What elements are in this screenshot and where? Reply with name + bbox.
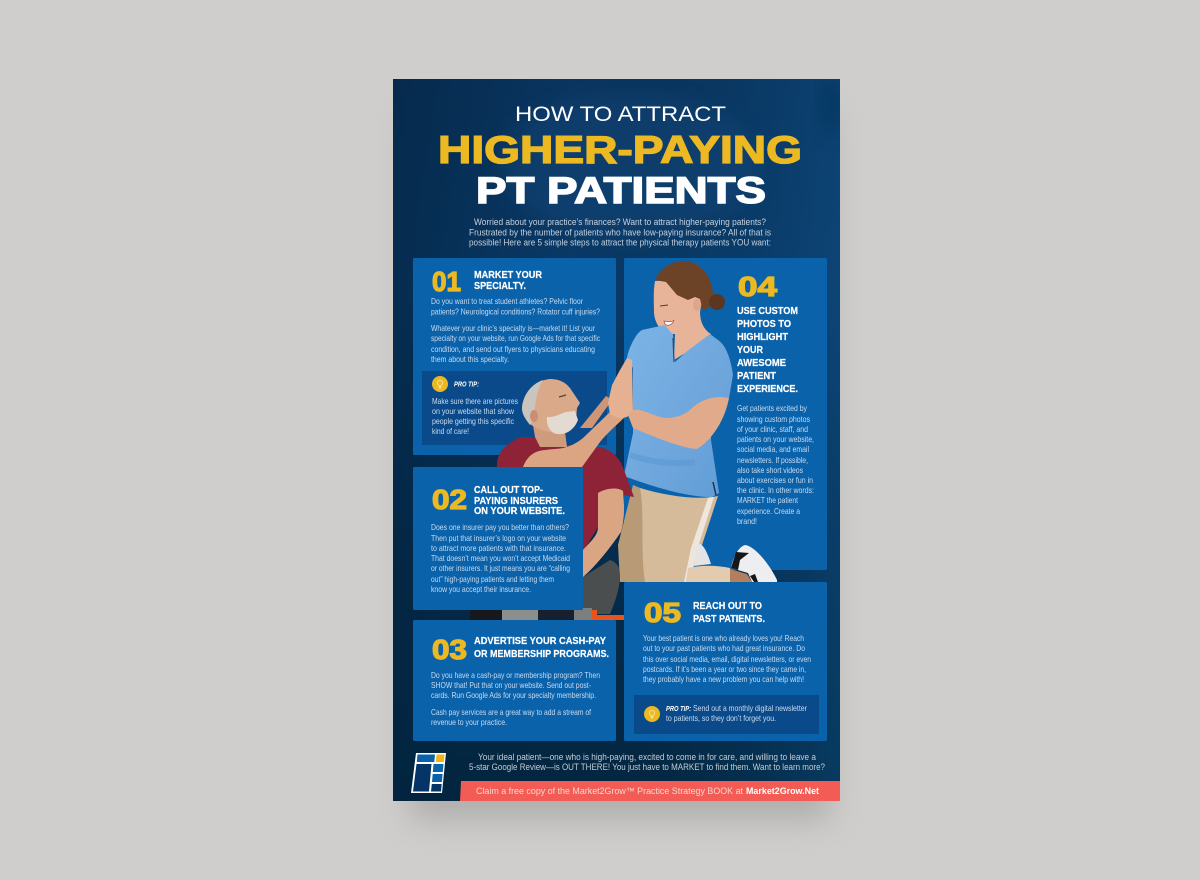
- closing text: [469, 752, 825, 772]
- step 04 body: about exercises or fun in: [737, 476, 813, 485]
- photo: patient high-fiving physical therapist: [470, 261, 777, 620]
- patient beard: [547, 411, 578, 434]
- pro tip box 1: [422, 371, 607, 445]
- step 02 heading: CALL OUT TOP-: [474, 485, 543, 496]
- icon: lightbulb: [432, 376, 448, 392]
- step 05 body: [643, 634, 811, 684]
- panel: step 03 cash-pay programs: [413, 620, 616, 741]
- step 01 body: [431, 297, 600, 364]
- closing text: Your ideal patient—one who is high-paying, excited to come in for care, and willing to leave a: [478, 752, 816, 762]
- pro tip text: [666, 704, 807, 723]
- step 04 body: experience. Create a: [737, 507, 800, 516]
- banner text: Market2Grow.Net: [746, 786, 820, 797]
- patient grey hair: [522, 380, 543, 425]
- patient head: [522, 379, 580, 447]
- nurse hair: [655, 261, 725, 311]
- closing text: 5-star Google Review—is OUT THERE! You just have to MARKET to find them. Want to learn more?: [469, 762, 825, 772]
- step 04 heading: EXPERIENCE.: [737, 384, 798, 395]
- step 04 body: showing custom photos: [737, 415, 810, 424]
- pro tip box 5: [634, 695, 819, 734]
- step 04 heading: USE CUSTOM: [737, 306, 798, 317]
- step 04 heading: HIGHLIGHT: [737, 332, 788, 343]
- title: HIGHER-PAYING: [438, 129, 802, 172]
- step number 02: 02: [432, 484, 467, 515]
- step 04 heading: YOUR: [737, 345, 763, 356]
- pro tip text: kind of care!: [432, 427, 469, 436]
- step 04 heading: [737, 306, 798, 395]
- step 01 body: condition, and send out flyers to physicians educating: [431, 345, 595, 354]
- step 03 heading: ADVERTISE YOUR CASH-PAY: [474, 636, 606, 647]
- step 01 heading: MARKET YOUR: [474, 270, 542, 281]
- poster drop shadow: [410, 115, 830, 820]
- step 01 heading: [474, 270, 542, 292]
- step 03 body: Do you have a cash-pay or membership program? Then: [431, 671, 600, 680]
- panel: step 01 market your specialty: [413, 258, 616, 455]
- nurse ear: [693, 299, 701, 311]
- step 02 heading: ON YOUR WEBSITE.: [474, 506, 565, 517]
- step 02 body: That doesn’t mean you won’t accept Medicaid: [431, 554, 570, 563]
- step 04 body: brand!: [737, 517, 757, 526]
- step 04 body: Get patients excited by: [737, 404, 808, 413]
- pro tip label: PRO TIP:: [454, 382, 479, 388]
- step 01 body: Whatever your clinic’s specialty is—market it! List your: [431, 324, 595, 333]
- step 05 heading: PAST PATIENTS.: [693, 614, 765, 625]
- panel: step 05 reach out to past patients: [624, 582, 827, 741]
- patient hand: [608, 358, 633, 418]
- step number 01: 01: [432, 266, 461, 297]
- step 04 heading: PATIENT: [737, 371, 776, 382]
- title: [438, 103, 802, 211]
- patient shorts: [560, 560, 620, 614]
- pro tip text: [432, 397, 518, 436]
- pro tip text: people getting this specific: [432, 417, 514, 426]
- patient shirt: [497, 437, 634, 552]
- patient raised arm: [523, 412, 630, 467]
- title: PT PATIENTS: [476, 170, 766, 211]
- step 03 body: SHOW that! Put that on your website. Send out post-: [431, 681, 591, 690]
- step 03 heading: OR MEMBERSHIP PROGRAMS.: [474, 649, 609, 660]
- nurse forearm: [628, 397, 729, 449]
- step 04 body: [737, 404, 814, 526]
- pro tip text: to patients, so they don’t forget you.: [666, 714, 776, 723]
- panel: step 02 call out insurers: [413, 467, 583, 610]
- step number 03: 03: [432, 634, 467, 665]
- step 05 body: out to your past patients who had great insurance. Do: [643, 644, 805, 653]
- step 04 heading: PHOTOS TO: [737, 319, 791, 330]
- step 01 body: patients? Neurological conditions? Rotator cuff injuries?: [431, 308, 600, 316]
- title: HOW TO ATTRACT: [515, 103, 726, 126]
- step 03 body: revenue to your practice.: [431, 718, 507, 727]
- step 02 heading: [474, 485, 565, 517]
- pro tip text: Make sure there are pictures: [432, 397, 518, 406]
- nurse shoes: [694, 544, 777, 582]
- patient ear: [530, 410, 538, 422]
- intro text: possible! Here are 5 simple steps to attract the physical therapy patients YOU want:: [469, 238, 771, 248]
- step 02 body: out” high-paying patients and letting them: [431, 575, 554, 584]
- step 05 body: they probably have a new problem you can help with!: [643, 675, 804, 684]
- step 02 body: to attract more patients with that insurance.: [431, 544, 566, 553]
- intro text: Worried about your practice’s finances? Want to attract higher-paying patients?: [474, 217, 766, 227]
- intro text: [469, 217, 772, 248]
- step 03 body: Cash pay services are a great way to add a stream of: [431, 708, 592, 717]
- nurse face details: [660, 305, 674, 325]
- patient lower arm: [583, 489, 624, 577]
- step 04 body: social media, and email: [737, 445, 809, 454]
- step 02 heading: PAYING INSURERS: [474, 496, 558, 507]
- nurse neck and face: [654, 280, 711, 360]
- step 01 heading: SPECIALTY.: [474, 281, 526, 292]
- step 04 body: of your clinic, staff, and: [737, 425, 808, 434]
- step 04 body: the clinic. In other words:: [737, 486, 814, 495]
- pro tip text: on your website that show: [432, 407, 514, 416]
- step 03 body: [431, 671, 600, 727]
- nurse scrubs: [624, 325, 733, 497]
- step 02 body: [431, 523, 570, 594]
- step 05 body: postcards. If it’s been a year or two since they came in,: [643, 665, 806, 674]
- poster background: [393, 75, 844, 801]
- pro tip text: Send out a monthly digital newsletter: [693, 704, 807, 713]
- step 05 heading: [693, 601, 765, 625]
- step 04 body: also take short videos: [737, 466, 803, 475]
- logo: [411, 753, 446, 793]
- orange dumbbell: [592, 610, 625, 620]
- step 01 body: them about this specialty.: [431, 355, 509, 364]
- step number 05: 05: [644, 597, 681, 628]
- step 04 heading: AWESOME: [737, 358, 786, 369]
- icon: lightbulb: [644, 706, 660, 722]
- step 04 body: patients on your website,: [737, 435, 814, 444]
- step 02 body: know you accept their insurance.: [431, 585, 531, 594]
- nurse legs: [618, 485, 752, 582]
- step 02 body: Then put that insurer’s logo on your website: [431, 534, 566, 543]
- step 01 body: Do you want to treat student athletes? Pelvic floor: [431, 297, 583, 306]
- scrub shading: [630, 338, 716, 495]
- step 05 heading: REACH OUT TO: [693, 601, 762, 612]
- step 04 body: newsletters. If possible,: [737, 456, 808, 465]
- call-to-action banner: [460, 781, 840, 801]
- step 05 body: this over social media, email, digital newsletters, or even: [643, 655, 811, 664]
- step 04 body: MARKET the patient: [737, 496, 799, 505]
- step 03 body: cards. Run Google Ads for your specialty membership.: [431, 691, 596, 700]
- patient back arm: [580, 396, 612, 428]
- panel: step 04 custom photos: [624, 258, 827, 570]
- infographic canvas: [393, 79, 840, 830]
- patient legs and floor strip: [470, 608, 592, 620]
- pro tip text: PRO TIP:: [666, 706, 691, 713]
- step 02 body: Does one insurer pay you better than others?: [431, 523, 569, 532]
- intro text: Frustrated by the number of patients who have low-paying insurance? All of that is: [469, 228, 772, 238]
- step 05 body: Your best patient is one who already loves you! Reach: [643, 634, 804, 643]
- step 02 body: or other insurers. It just means you are “calling: [431, 564, 570, 573]
- step 01 body: specialty on your website, run Google Ads for that specific: [431, 334, 600, 343]
- step 03 heading: [474, 636, 609, 660]
- step number 04: 04: [738, 271, 778, 302]
- banner text: Claim a free copy of the Market2Grow™ Practice Strategy BOOK at: [476, 786, 743, 796]
